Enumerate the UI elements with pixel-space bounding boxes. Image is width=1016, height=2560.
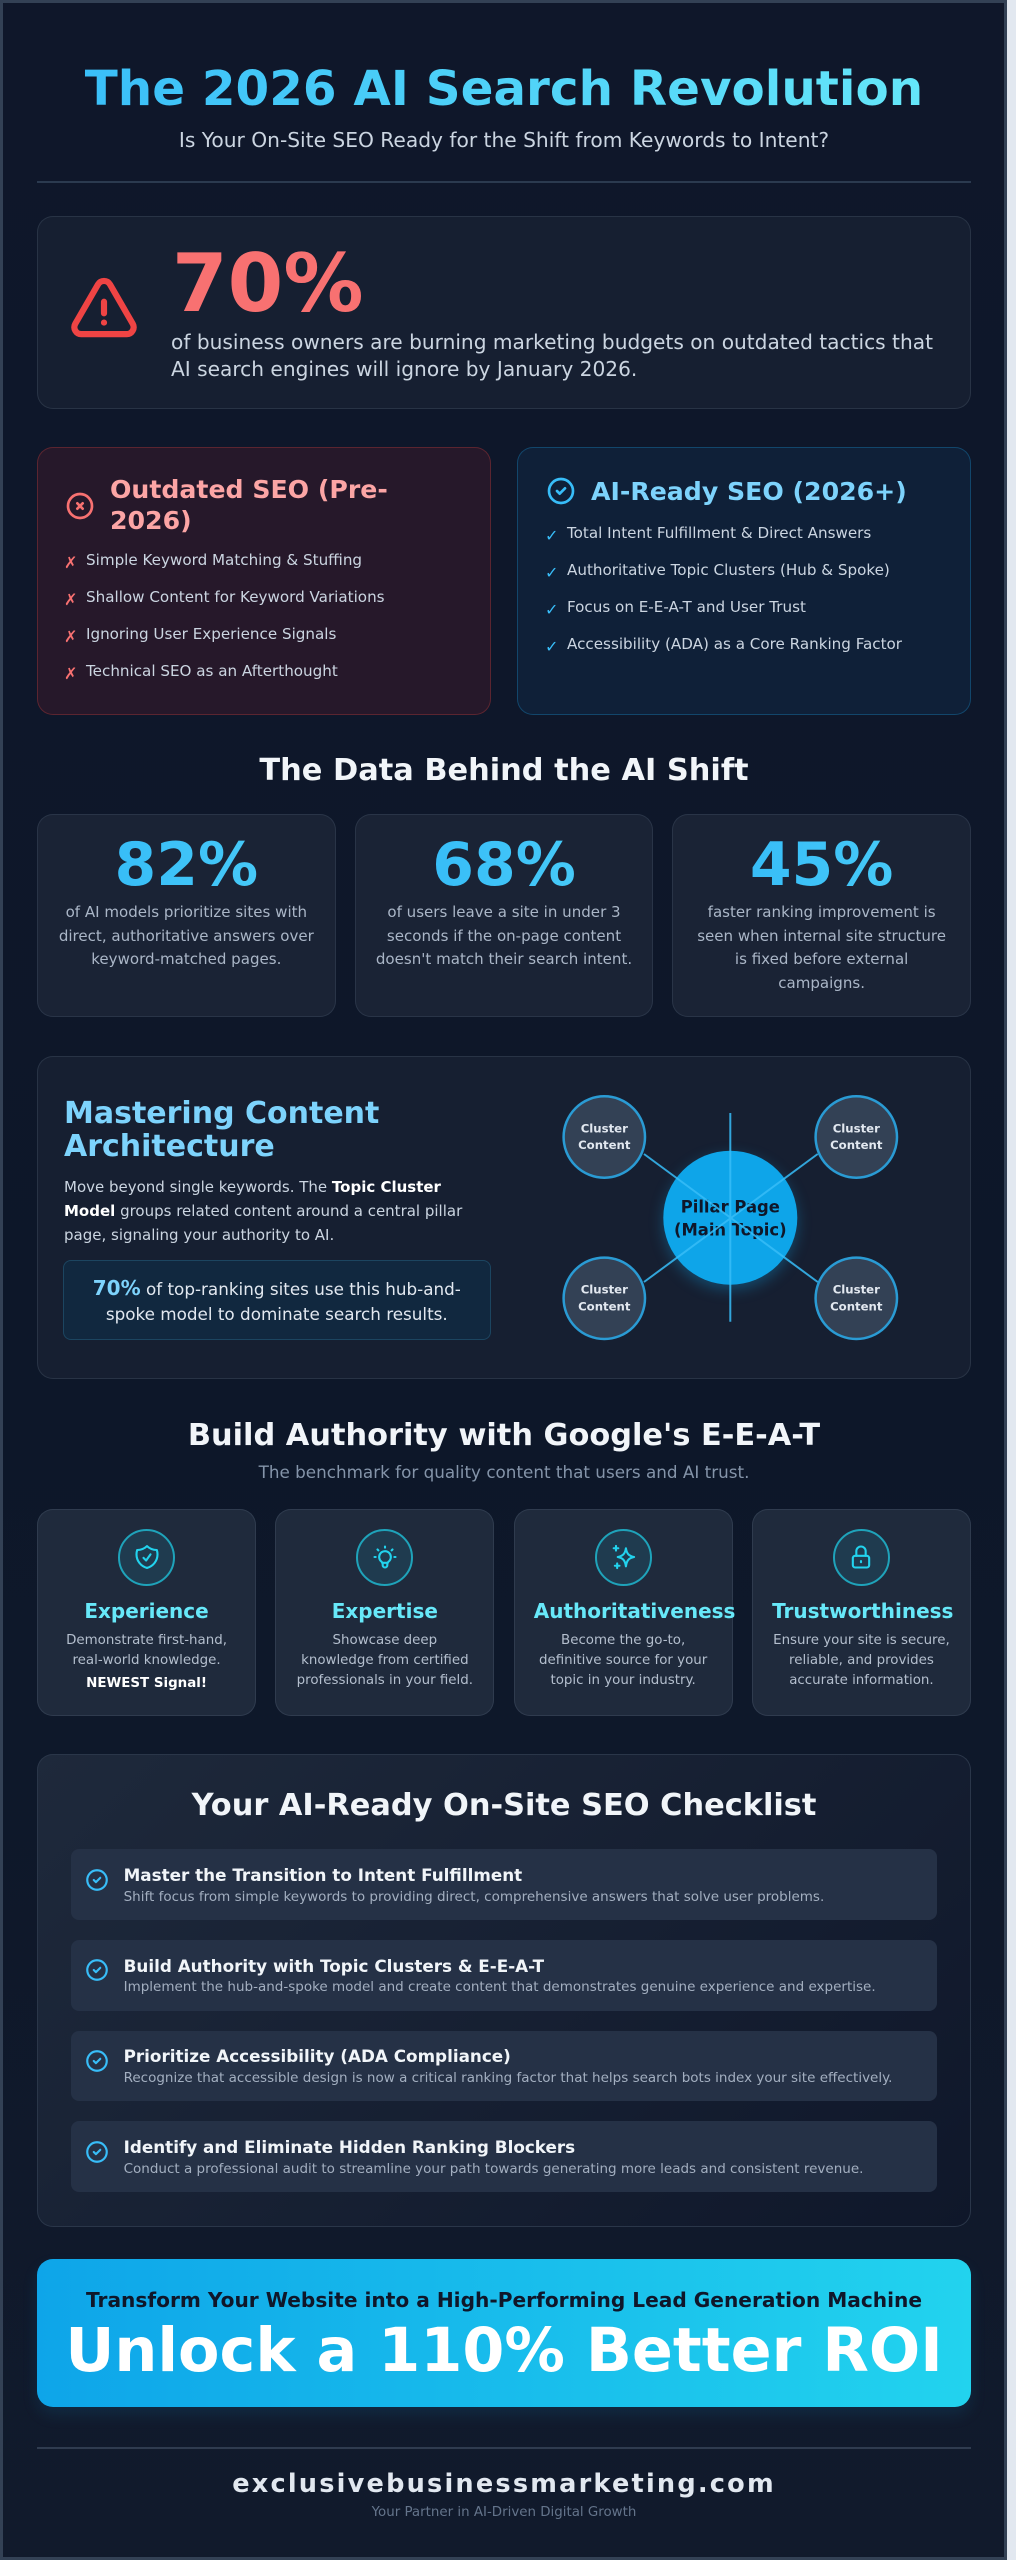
spoke connectors xyxy=(644,1113,818,1322)
heading: E-E-A-T: Build Authority with Google's E-E-A-T xyxy=(188,1418,820,1453)
list item: Focus on E-E-A-T and User Trust xyxy=(567,598,806,616)
heading: data section: The Data Behind the AI Shift xyxy=(259,752,749,788)
card text: accurate information. xyxy=(789,1673,934,1688)
cluster node: bottom right: Cluster xyxy=(833,1283,880,1297)
footer: tagline: Your Partner in AI-Driven Digital Growth xyxy=(372,2505,636,2520)
stat number: 68% xyxy=(432,830,576,900)
stat card: 82% xyxy=(37,814,336,1017)
list item: ✓ xyxy=(545,526,558,545)
card name: Authoritativeness xyxy=(534,1599,735,1623)
callout: 70% hub-and-spoke: spoke model to dominate search results. xyxy=(106,1304,448,1324)
stat number xyxy=(37,830,336,900)
checklist item 1: Shift focus from simple keywords to providing direct, comprehensive answers that solve user problems. xyxy=(124,1889,824,1905)
card text: professionals in your field. xyxy=(297,1673,473,1688)
card: authoritativeness xyxy=(514,1509,733,1716)
cluster node: bottom right: Content xyxy=(830,1299,883,1313)
checklist item 2: Implement the hub-and-spoke model and create content that demonstrates genuine experience and expertise. xyxy=(124,1979,876,1995)
architecture paragraph: Move beyond single keywords. The Topic Cluster xyxy=(64,1178,441,1196)
card: trustworthiness xyxy=(752,1509,971,1716)
stat description: faster ranking improvement is xyxy=(708,903,936,921)
checklist item 1 xyxy=(71,1849,937,1920)
stat description: campaigns. xyxy=(778,974,865,992)
list item: Shallow Content for Keyword Variations xyxy=(86,588,385,606)
heading: outdated SEO: Outdated SEO (Pre- xyxy=(110,474,388,504)
checklist item 4: Identify and Eliminate Hidden Ranking Blockers xyxy=(124,2137,575,2157)
list item: ✗ xyxy=(64,553,77,572)
stat description xyxy=(59,903,314,968)
checklist item 2: Build Authority with Topic Clusters & E-E-A-T xyxy=(124,1956,544,1976)
card text xyxy=(66,1633,227,1668)
stat description: direct, authoritative answers over xyxy=(59,927,314,945)
list item: Technical SEO as an Afterthought xyxy=(86,662,338,680)
panel: checklist xyxy=(37,1754,971,2227)
stat description: seconds if the on-page content xyxy=(387,927,621,945)
list item: ✗ xyxy=(64,627,77,646)
icon: lock xyxy=(833,1528,890,1586)
subheading: E-E-A-T: The benchmark for quality content that users and AI trust. xyxy=(259,1462,749,1482)
card text xyxy=(539,1633,708,1688)
checklist item 4 xyxy=(71,2121,937,2192)
callout: 70% hub-and-spoke: 70% of top-ranking sites use this hub-and- xyxy=(93,1276,461,1300)
stat number: 82% xyxy=(115,830,258,900)
big number 70%: 70% xyxy=(172,237,363,330)
hero statement text xyxy=(171,330,933,380)
architecture paragraph: Model groups related content around a central pillar xyxy=(64,1202,462,1220)
icon: check circle xyxy=(548,478,574,504)
list item: Total Intent Fulfillment & Direct Answers xyxy=(567,524,871,542)
architecture paragraph xyxy=(64,1178,462,1244)
subtitle: Is Your On-Site SEO Ready for the Shift from Keywords to Intent? xyxy=(179,128,829,152)
icon: warning triangle xyxy=(71,278,137,338)
cluster node: bottom left: Content xyxy=(578,1299,631,1313)
list item: Ignoring User Experience Signals xyxy=(86,625,336,643)
card text: knowledge from certified xyxy=(301,1653,469,1668)
checklist item 1: Master the Transition to Intent Fulfillment xyxy=(124,1865,522,1885)
heading: outdated SEO xyxy=(110,474,388,534)
stat description: seen when internal site structure xyxy=(697,927,946,945)
list item: ✓ xyxy=(545,600,558,619)
cluster node: bottom left xyxy=(564,1258,645,1339)
title: The 2026 AI Search Revolution xyxy=(85,60,923,116)
card text: Become the go-to, xyxy=(561,1633,685,1648)
list item: Authoritative Topic Clusters (Hub & Spoke) xyxy=(567,561,890,579)
hero statement text: of business owners are burning marketing budgets on outdated tactics that xyxy=(171,330,933,354)
newest signal note: NEWEST Signal! xyxy=(86,1676,207,1691)
card text xyxy=(297,1633,473,1688)
heading: outdated SEO: 2026) xyxy=(110,506,192,534)
CTA headline: Unlock a 110% Better ROI xyxy=(65,2316,943,2386)
checklist item 3: Prioritize Accessibility (ADA Compliance) xyxy=(124,2046,511,2066)
hero statement text: AI search engines will ignore by January 2026. xyxy=(171,356,637,380)
pillar page node: Pillar Page xyxy=(681,1197,780,1216)
pillar page node: (Main Topic) xyxy=(674,1220,787,1239)
heading: AI-ready SEO: AI-Ready SEO (2026+) xyxy=(591,476,907,506)
cluster node: top left xyxy=(564,1096,645,1178)
panel: outdated SEO xyxy=(37,447,491,715)
stat number xyxy=(355,830,653,900)
card name: Expertise xyxy=(332,1599,438,1623)
cluster node: top right: Content xyxy=(830,1138,883,1152)
list item: ✗ xyxy=(64,664,77,683)
stat number: 45% xyxy=(750,830,893,900)
heading: mastering content architecture: Mastering Content xyxy=(64,1096,379,1131)
checklist item 4: Conduct a professional audit to streamline your path towards generating more leads and consistent revenue. xyxy=(124,2161,863,2177)
stat description xyxy=(376,903,632,968)
stat description: is fixed before external xyxy=(735,950,908,968)
stat description: of users leave a site in under 3 xyxy=(387,903,621,921)
card text: Showcase deep xyxy=(333,1633,437,1648)
diagram: topic cluster hub and spoke xyxy=(562,1095,898,1340)
pillar page node xyxy=(663,1151,797,1285)
architecture paragraph: page, signaling your authority to AI. xyxy=(64,1226,334,1244)
heading: mastering content architecture: Architecture xyxy=(64,1129,275,1164)
stat number xyxy=(672,830,971,900)
cluster node: bottom right xyxy=(816,1258,897,1339)
panel: content architecture xyxy=(37,1056,971,1379)
cluster node: bottom left: Cluster xyxy=(581,1283,628,1297)
callout: 70% hub-and-spoke xyxy=(63,1260,491,1340)
list item: Simple Keyword Matching & Stuffing xyxy=(86,551,362,569)
checklist item 2 xyxy=(71,1940,937,2011)
card name: Trustworthiness xyxy=(772,1599,953,1623)
cluster node: top right: Cluster xyxy=(833,1121,880,1135)
footer: website: exclusivebusinessmarketing.com xyxy=(232,2469,776,2499)
card: expertise xyxy=(275,1509,494,1716)
icon: shield check xyxy=(118,1528,175,1586)
card name: Experience xyxy=(84,1599,209,1623)
checklist item 3 xyxy=(71,2031,937,2101)
stat description: doesn't match their search intent. xyxy=(376,950,632,968)
cluster node: top left: Cluster xyxy=(581,1121,628,1135)
heading: mastering content architecture xyxy=(64,1096,379,1164)
heading: checklist: Your AI-Ready On-Site SEO Checklist xyxy=(192,1788,816,1822)
icon: light bulb xyxy=(356,1528,413,1586)
card text: real-world knowledge. xyxy=(72,1653,221,1668)
panel: AI-ready SEO xyxy=(516,447,971,715)
card: experience xyxy=(37,1509,256,1716)
panel: 70% hero stat xyxy=(37,216,971,409)
icon: x circle xyxy=(66,492,94,520)
icon: sparkles xyxy=(595,1528,652,1586)
stat description xyxy=(697,903,946,992)
list item: Accessibility (ADA) as a Core Ranking Factor xyxy=(567,635,902,653)
cluster node: top right xyxy=(816,1096,897,1178)
CTA kicker: Transform Your Website into a High-Performing Lead Generation Machine xyxy=(86,2288,922,2312)
checklist item 3: Recognize that accessible design is now a critical ranking factor that helps search bots index your site effectively. xyxy=(124,2070,892,2086)
stat description: of AI models prioritize sites with xyxy=(66,903,307,921)
stat description: keyword-matched pages. xyxy=(91,950,281,968)
panel: call to action xyxy=(37,2259,971,2407)
card text: Demonstrate first-hand, xyxy=(66,1633,227,1648)
list item: ✓ xyxy=(545,563,558,582)
card text xyxy=(773,1633,950,1688)
stat card: 45% xyxy=(672,814,971,1017)
card text: definitive source for your xyxy=(539,1653,707,1668)
stat card: 68% xyxy=(355,814,653,1017)
cluster node: top left: Content xyxy=(578,1138,631,1152)
card text: topic in your industry. xyxy=(550,1673,696,1688)
list item: ✗ xyxy=(64,590,77,609)
card text: reliable, and provides xyxy=(789,1653,934,1668)
card text: Ensure your site is secure, xyxy=(773,1633,950,1648)
list item: ✓ xyxy=(545,637,558,656)
